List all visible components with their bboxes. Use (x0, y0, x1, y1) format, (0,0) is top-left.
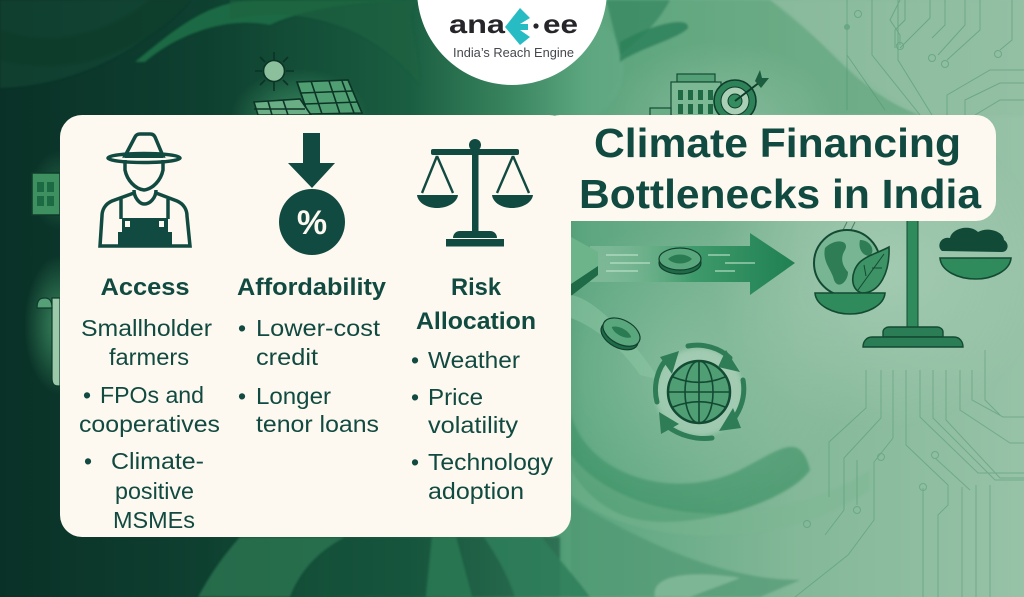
list: Affordability (238, 315, 381, 437)
panel: bottlenecks (60, 115, 571, 537)
logo tagline: India’s Reach Engine (453, 46, 574, 60)
panel: title (540, 115, 996, 221)
heading: Risk Allocation: Allocation (416, 308, 536, 335)
icon: balance scale with earth and cloud (814, 215, 1011, 347)
heading: Risk Allocation (416, 274, 536, 335)
icon: device edge (571, 237, 598, 296)
logo mark (505, 8, 530, 45)
circuit lines: bottom right (795, 350, 1024, 597)
list: Access: • (84, 448, 92, 474)
list: Access: farmers (109, 344, 189, 370)
circuit lines: top right (844, 0, 1024, 115)
list: Risk Allocation: • (411, 384, 419, 410)
list: Access: FPOs and (100, 382, 204, 408)
list: Affordability: Longer (256, 383, 331, 409)
list: Affordability: tenor loans (256, 411, 379, 437)
icon: scales (417, 139, 533, 246)
list: Affordability: • (238, 383, 246, 409)
list: Access: • (83, 382, 91, 408)
heading: Risk Allocation: Risk (451, 274, 502, 301)
icon: left scroll (37, 298, 60, 386)
list: Affordability: Lower-cost (256, 315, 381, 341)
column: Access (79, 134, 220, 533)
list: Risk Allocation: • (411, 449, 419, 475)
list: Access: cooperatives (79, 411, 220, 437)
logo wordmark left: ana (449, 9, 506, 39)
icon: globe with circular arrows (655, 345, 744, 438)
list: Risk Allocation: Price (428, 384, 483, 410)
column: Affordability (237, 133, 387, 437)
column: Risk Allocation (411, 139, 554, 504)
icon: flow arrow with coin (590, 233, 795, 295)
icon: right building and target (650, 70, 769, 122)
icon: down arrow with percent (279, 133, 345, 255)
list: Affordability: credit (256, 344, 319, 370)
list: Access: Climate- (111, 448, 204, 474)
title line 1: Climate Financing (594, 120, 961, 166)
icon: solar panels (254, 80, 362, 115)
list: Risk Allocation: Technology (428, 449, 554, 475)
list: Access: MSMEs (113, 507, 195, 533)
heading: Affordability: Affordability (237, 274, 387, 301)
icon: down arrow with percent: % (297, 204, 327, 242)
icon: second coin and ribbon (571, 295, 660, 380)
logo dot (533, 23, 539, 29)
logo wordmark right: ee (543, 9, 578, 39)
list: Risk Allocation: volatility (428, 412, 519, 438)
icon: sun (255, 52, 294, 91)
list: Risk Allocation: Weather (428, 347, 520, 373)
icon: farmer (100, 134, 190, 246)
list: Risk Allocation (411, 347, 554, 504)
list: Risk Allocation: adoption (428, 478, 524, 504)
heading: Access: Access (100, 274, 190, 301)
list: Risk Allocation: • (411, 347, 419, 373)
list: Access: positive (115, 478, 194, 504)
list: Access: Smallholder (81, 315, 212, 341)
icon: left building (32, 173, 60, 215)
list: Affordability: • (238, 315, 246, 341)
title line 2: Bottlenecks in India (579, 171, 982, 217)
logo badge (417, 0, 607, 85)
list: Access (79, 315, 220, 533)
